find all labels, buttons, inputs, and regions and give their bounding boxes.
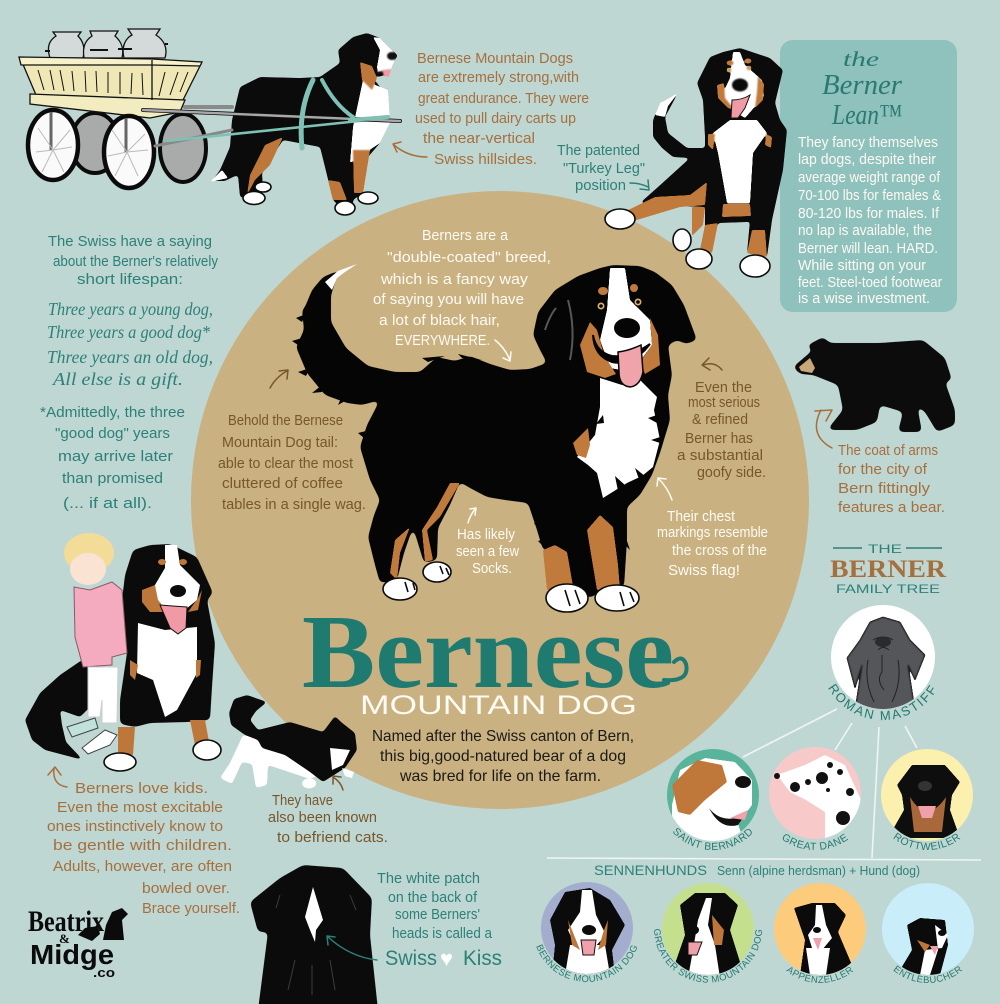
text: Swiss saying about lifespan: Three years an old dog,	[47, 347, 213, 367]
body text: feet. Steel-toed footwear	[798, 275, 942, 291]
heading: the Berner family tree: FAMILY TREE	[836, 582, 940, 596]
heading: the Berner family tree: BERNER	[830, 556, 947, 583]
text: Berners love kids: ones instinctively know to	[47, 819, 223, 835]
tongue	[618, 345, 643, 387]
text: Berners love kids: be gentle with children.	[53, 838, 232, 854]
text: turkey leg note	[557, 143, 645, 194]
text: goofy side note: & refined	[692, 412, 748, 428]
text: strong dogs note: are extremely strong,with	[418, 70, 579, 86]
dog tongue	[160, 605, 187, 634]
text: strong dogs note: Bernese Mountain Dogs	[417, 51, 573, 67]
body text: Berner will lean. HARD.	[798, 241, 938, 257]
family tree: Entlebucher	[882, 883, 974, 983]
text: tail note: Behold the Bernese	[228, 413, 343, 429]
text: turkey leg note: position	[575, 178, 626, 194]
dog paws	[104, 740, 221, 771]
body text: They fancy themselves	[798, 135, 938, 151]
text: double coated note: of saying you will have	[373, 292, 524, 308]
title: Bernese: Bernese	[302, 593, 674, 710]
text: Swiss saying about lifespan: *Admittedly, the three	[40, 405, 185, 421]
white patch	[305, 887, 323, 942]
text: tail note: cluttered of coffee	[222, 476, 343, 492]
text: tail note	[218, 413, 366, 513]
text: Swiss saying about lifespan: may arrive later	[58, 449, 173, 465]
family tree: Roman Mastiff: ROMAN MASTIFF	[828, 684, 934, 720]
arrow: to tail	[270, 370, 288, 388]
body text: While sitting on your	[798, 258, 926, 274]
text: coat of arms	[838, 443, 945, 516]
logo: Beatrix and Midge: Beatrix	[28, 905, 104, 938]
Sennenhunds label	[594, 863, 920, 878]
illustration: main Bernese Mountain Dog	[292, 262, 697, 612]
family tree: Appenzeller	[774, 883, 866, 983]
text: Swiss saying about lifespan: All else is a gift.	[52, 369, 183, 389]
family tree: Greater Swiss Mountain Dog: GREATER SWISS MOUNTAIN DOG	[654, 929, 762, 983]
family tree: Appenzeller: APPENZELLER	[786, 967, 854, 983]
family tree: Bernese Mountain Dog	[536, 882, 637, 982]
text: Swiss saying about lifespan: (... if at all).	[63, 496, 152, 512]
text: Swiss kiss note: ♥	[440, 946, 453, 971]
logo: Beatrix and Midge: Midge	[30, 939, 114, 970]
text: Swiss kiss note: on the back of	[388, 890, 478, 906]
cart dog markings	[210, 37, 397, 200]
text: Berners love kids: bowled over.	[142, 881, 230, 897]
text: chest markings note: markings resemble	[657, 525, 768, 541]
body text: average weight range of	[798, 170, 941, 186]
paws	[605, 209, 770, 277]
bear muzzle	[799, 358, 815, 373]
text: Swiss saying about lifespan: "good dog" years	[55, 426, 170, 442]
family tree: Roman Mastiff	[828, 605, 935, 720]
milk cans	[45, 29, 168, 58]
text: intro: Named after the Swiss canton of Bern,	[372, 728, 634, 745]
text: Swiss saying about lifespan: The Swiss have a saying	[48, 234, 212, 250]
wagon body	[19, 57, 202, 118]
tan central circle	[191, 191, 809, 809]
tongue	[731, 95, 750, 118]
far wheels	[71, 113, 206, 182]
text: goofy side note	[677, 380, 766, 481]
text: turkey leg note: The patented	[557, 143, 640, 159]
child	[64, 533, 127, 754]
heading: the Berner family tree: THE	[868, 542, 902, 556]
heading: the Berner Lean: Lean™	[831, 99, 902, 131]
text: socks note	[456, 527, 519, 577]
text: Swiss saying about lifespan: about the Berner's relatively	[53, 254, 219, 270]
panel: the Berner Lean	[780, 40, 957, 312]
text: befriend cats: also been known	[268, 810, 377, 826]
subtitle: Mountain Dog: MOUNTAIN DOG	[360, 690, 637, 720]
arrow: to harness	[393, 142, 427, 157]
title swash	[664, 658, 687, 680]
heading: the Berner Lean	[822, 47, 903, 131]
fur streaks	[276, 895, 356, 995]
text: befriend cats: They have	[272, 793, 333, 809]
text: coat of arms: Bern fittingly	[838, 481, 931, 497]
family tree: Saint Bernard: SAINT BERNARD	[673, 828, 752, 850]
text: turkey leg note: "Turkey Leg"	[563, 161, 645, 177]
white chest	[577, 378, 660, 498]
text: double coated note: Berners are a	[422, 228, 509, 244]
arrow: to coat	[495, 340, 511, 361]
text: goofy side note: Berner has	[685, 431, 753, 447]
heading: the Berner Lean: Berner	[822, 69, 903, 101]
text: socks note: Has likely	[457, 527, 516, 543]
tail tip	[325, 264, 357, 290]
heading: the Berner Lean: the	[843, 47, 879, 71]
arrow: to socks	[468, 508, 476, 523]
text: tail note: Mountain Dog tail:	[222, 435, 338, 451]
text: Berners love kids: Berners love kids.	[75, 781, 208, 797]
dog silhouette	[120, 544, 215, 727]
text: chest markings note: Swiss flag!	[668, 563, 740, 579]
text: Swiss kiss note: heads is called a	[392, 926, 493, 942]
text: intro: this big,good-natured bear of a dog	[380, 748, 626, 765]
arrow: to chest	[657, 478, 672, 500]
logo: Beatrix and Midge: &	[59, 931, 70, 946]
family tree: Bernese Mountain Dog: BERNESE MOUNTAIN DOG	[536, 944, 637, 982]
text: Swiss kiss note: some Berners'	[395, 907, 480, 923]
text: goofy side note: most serious	[688, 395, 760, 411]
family tree: Rottweiler	[881, 749, 973, 850]
silhouette	[640, 48, 787, 257]
silhouette	[296, 262, 697, 597]
text: socks note: seen a few	[456, 544, 519, 560]
text: Berners love kids	[47, 781, 240, 917]
cart poles and harness straps	[143, 80, 400, 148]
text: Berners love kids: Even the most excitable	[57, 800, 223, 816]
near wheels	[28, 110, 154, 188]
family tree: Entlebucher: ENTLEBUCHER	[894, 965, 962, 983]
text: strong dogs note: Swiss hillsides.	[434, 152, 537, 168]
text: tail note: tables in a single wag.	[222, 497, 366, 513]
cart dog silhouette	[212, 33, 397, 207]
cat black body and tail	[229, 695, 357, 782]
illustration: child with sitting dog	[25, 533, 221, 771]
text: intro	[372, 728, 634, 785]
body text: lap dogs, despite their	[798, 152, 936, 168]
text: Berners love kids: Adults, however, are often	[53, 859, 232, 875]
arrow: to child	[48, 767, 67, 787]
text: tail note: able to clear the most	[218, 456, 353, 472]
text: strong dogs note	[415, 51, 589, 168]
text: socks note: Socks.	[472, 561, 512, 577]
text: Swiss saying about lifespan: short lifespan:	[77, 272, 183, 288]
text: strong dogs note: used to pull dairy carts up	[415, 111, 576, 127]
text: chest markings note	[657, 509, 768, 579]
text: coat of arms: features a bear.	[838, 500, 945, 516]
text: Berners love kids: Brace yourself.	[142, 901, 240, 917]
text: double coated note: a lot of black hair,	[379, 313, 500, 329]
body text: is a wise investment.	[798, 291, 930, 307]
text: befriend cats: to befriend cats.	[277, 830, 388, 846]
text: goofy side note: a substantial	[677, 448, 763, 464]
logo: Beatrix and Midge	[28, 905, 128, 980]
text: double coated note: "double-coated" breed,	[387, 250, 551, 266]
body text: 80-120 lbs for males. If	[798, 206, 940, 222]
text: Swiss saying about lifespan: than promised	[62, 471, 163, 487]
text: Swiss kiss note	[377, 871, 502, 971]
family tree: Saint Bernard	[667, 749, 759, 850]
text: double coated note: EVERYWHERE.	[395, 333, 490, 349]
Sennenhunds label: Senn (alpine herdsman) + Hund (dog)	[717, 863, 920, 878]
text: befriend cats	[268, 793, 388, 846]
white paws	[383, 562, 639, 612]
text: double coated note: which is a fancy way	[380, 272, 529, 288]
text: coat of arms: for the city of	[838, 462, 928, 478]
body text: no lap is available, the	[798, 223, 932, 239]
text: goofy side note: goofy side.	[697, 465, 766, 481]
cat white rear and legs	[220, 735, 330, 788]
arrow: to bear	[815, 410, 832, 448]
body text: 70-100 lbs for females &	[798, 188, 941, 204]
tail	[25, 660, 92, 760]
illustration: back of head with Swiss kiss	[250, 865, 378, 1004]
face blaze and muzzle	[600, 268, 652, 372]
illustration: cat	[220, 695, 357, 788]
nose and mouth	[614, 318, 640, 338]
text: Swiss saying about lifespan: Three years a young dog,	[48, 299, 213, 319]
family tree: Rottweiler: ROTTWEILER	[893, 832, 960, 850]
family tree: Great Dane: GREAT DANE	[782, 834, 848, 850]
text: Swiss kiss note: The white patch	[377, 871, 480, 887]
fur tufts	[292, 314, 630, 550]
arrow: to Swiss kiss	[327, 936, 377, 960]
arrow: to face	[702, 358, 722, 370]
text: chest markings note: the cross of the	[672, 543, 767, 559]
arrow: to cat	[333, 776, 343, 790]
text: strong dogs note: the near-vertical	[423, 131, 535, 147]
eyebrows and eyes	[597, 284, 642, 310]
dog markings	[137, 545, 200, 717]
cat chest and paws	[302, 748, 354, 788]
text: coat of arms: The coat of arms	[838, 443, 938, 459]
cart dog paws	[243, 182, 378, 215]
text: Swiss kiss note: Kiss	[463, 947, 502, 970]
text: Swiss saying about lifespan	[40, 234, 219, 512]
markings	[622, 52, 772, 257]
text: chest markings note: Their chest	[667, 509, 735, 525]
text: double coated note	[373, 228, 551, 349]
heading: the Berner family tree	[830, 542, 947, 596]
text: Swiss saying about lifespan: Three years a good dog*	[47, 322, 210, 342]
logo: Beatrix and Midge: .co	[93, 965, 115, 980]
arrow: to turkey leg	[630, 180, 649, 190]
tan chest patch	[573, 428, 590, 458]
ear highlight	[545, 300, 573, 360]
text: Swiss kiss note: Swiss	[385, 947, 437, 970]
tan cheeks	[580, 318, 660, 378]
chest fur spikes	[596, 414, 660, 491]
family tree: Greater Swiss Mountain Dog	[654, 883, 762, 983]
illustration: bear	[793, 337, 955, 432]
family tree: Great Dane	[769, 747, 861, 850]
text: intro: was bred for life on the farm.	[399, 768, 601, 785]
Sennenhunds label: SENNENHUNDS	[594, 863, 707, 878]
text: strong dogs note: great endurance. They were	[418, 91, 589, 107]
family tree connector lines	[547, 709, 981, 860]
tan leg markings	[390, 483, 620, 590]
illustration: dog pulling milk cart	[19, 29, 400, 215]
body text	[798, 135, 942, 307]
illustration: sitting dog in turkey-leg pose	[605, 48, 787, 277]
text: goofy side note: Even the	[695, 380, 752, 396]
